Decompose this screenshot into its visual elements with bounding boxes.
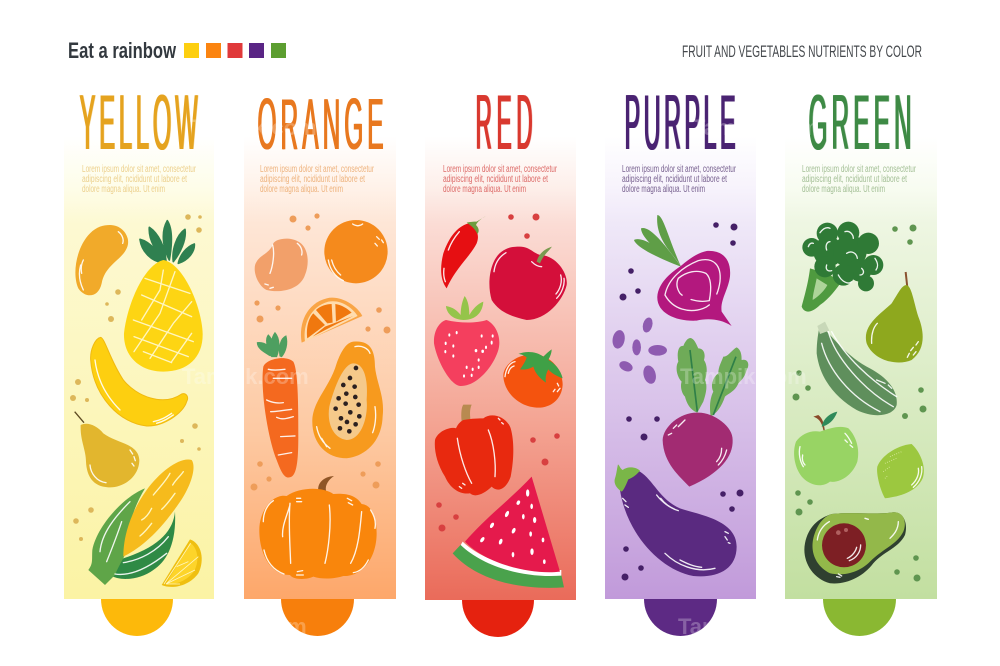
watermarks: Tampik.com	[180, 614, 307, 639]
icon: peach	[255, 239, 308, 291]
green dots	[792, 224, 926, 582]
title: Eat a rainbow	[68, 38, 177, 63]
text: red description: dolore magna aliqua. Ut enim	[443, 184, 526, 195]
panel: orange	[244, 85, 396, 636]
watermarks: Tampik.com	[190, 115, 317, 140]
text: red description: Lorem ipsum dolor sit amet, consectetur	[443, 164, 557, 175]
text: orange description: dolore magna aliqua. Ut enim	[260, 184, 343, 195]
icon: mango	[75, 225, 128, 295]
icon: bell pepper	[435, 405, 513, 495]
panel: red	[425, 80, 576, 637]
heading: red: RED	[475, 80, 532, 167]
text: red description	[443, 164, 557, 195]
icon: corn	[88, 460, 194, 585]
icon: beetroot with leaves	[663, 338, 748, 487]
watermarks: Tampik.com	[182, 364, 309, 389]
text: yellow description	[82, 164, 196, 195]
icon: strawberry	[434, 296, 499, 386]
text: purple description	[622, 164, 736, 195]
icon: sliced beet	[634, 215, 732, 326]
text: green description: dolore magna aliqua. Ut enim	[802, 184, 885, 195]
watermarks: Tampik.com	[678, 614, 805, 639]
text: orange description	[260, 164, 374, 195]
text: green description	[802, 164, 916, 195]
text: orange description: adipiscing elit, ncididunt ut labore et	[260, 174, 365, 185]
text: yellow description: adipiscing elit, ncididunt ut labore et	[82, 174, 187, 185]
legend: colour squares	[184, 43, 286, 58]
heading: orange: ORANGE	[257, 85, 383, 165]
icon: orange slice	[301, 298, 362, 343]
panel: green	[785, 80, 937, 636]
icon: carrot	[257, 333, 298, 477]
panel: yellow	[64, 80, 214, 636]
text: yellow description: dolore magna aliqua. Ut enim	[82, 184, 165, 195]
icon: lime	[877, 444, 924, 498]
text: purple description: dolore magna aliqua. Ut enim	[622, 184, 705, 195]
watermarks	[180, 115, 819, 639]
icon: banana	[91, 337, 188, 426]
text: orange description: Lorem ipsum dolor sit amet, consectetur	[260, 164, 374, 175]
text: purple description: Lorem ipsum dolor sit amet, consectetur	[622, 164, 736, 175]
icon: apple	[489, 247, 567, 320]
icon: pear	[866, 272, 923, 363]
heading: green: GREEN	[808, 80, 911, 167]
watermarks: Tampik.com	[692, 115, 819, 140]
yellow dots	[70, 214, 202, 541]
heading: purple: PURPLE	[624, 80, 735, 167]
icon: zucchini	[817, 322, 897, 415]
heading: yellow: YELLOW	[79, 80, 197, 167]
icon: eggplant	[615, 464, 737, 576]
icon: pumpkin	[259, 476, 377, 579]
icon: lemon slice	[162, 539, 202, 587]
icon: papaya	[312, 341, 383, 458]
icon: pineapple	[124, 221, 203, 372]
purple dots	[620, 222, 744, 580]
icon: green apple	[794, 412, 858, 485]
watermarks: Tampik.com	[680, 364, 807, 389]
icon: tomato	[503, 349, 563, 408]
icon: watermelon	[453, 477, 564, 588]
text: green description: adipiscing elit, ncididunt ut labore et	[802, 174, 907, 185]
icon: chili	[441, 216, 486, 288]
text: red description: adipiscing elit, ncididunt ut labore et	[443, 174, 548, 185]
text: purple description: adipiscing elit, ncididunt ut labore et	[622, 174, 727, 185]
icon: avocado	[804, 512, 906, 584]
text: green description: Lorem ipsum dolor sit amet, consectetur	[802, 164, 916, 175]
icon: grapes	[611, 316, 667, 385]
text: yellow description: Lorem ipsum dolor sit amet, consectetur	[82, 164, 196, 175]
red dots	[436, 214, 560, 532]
orange dots	[250, 213, 390, 490]
icon: whole orange	[324, 220, 388, 283]
icon: pear	[75, 412, 139, 487]
icon: broccoli	[802, 222, 883, 312]
panel: purple	[605, 80, 756, 636]
